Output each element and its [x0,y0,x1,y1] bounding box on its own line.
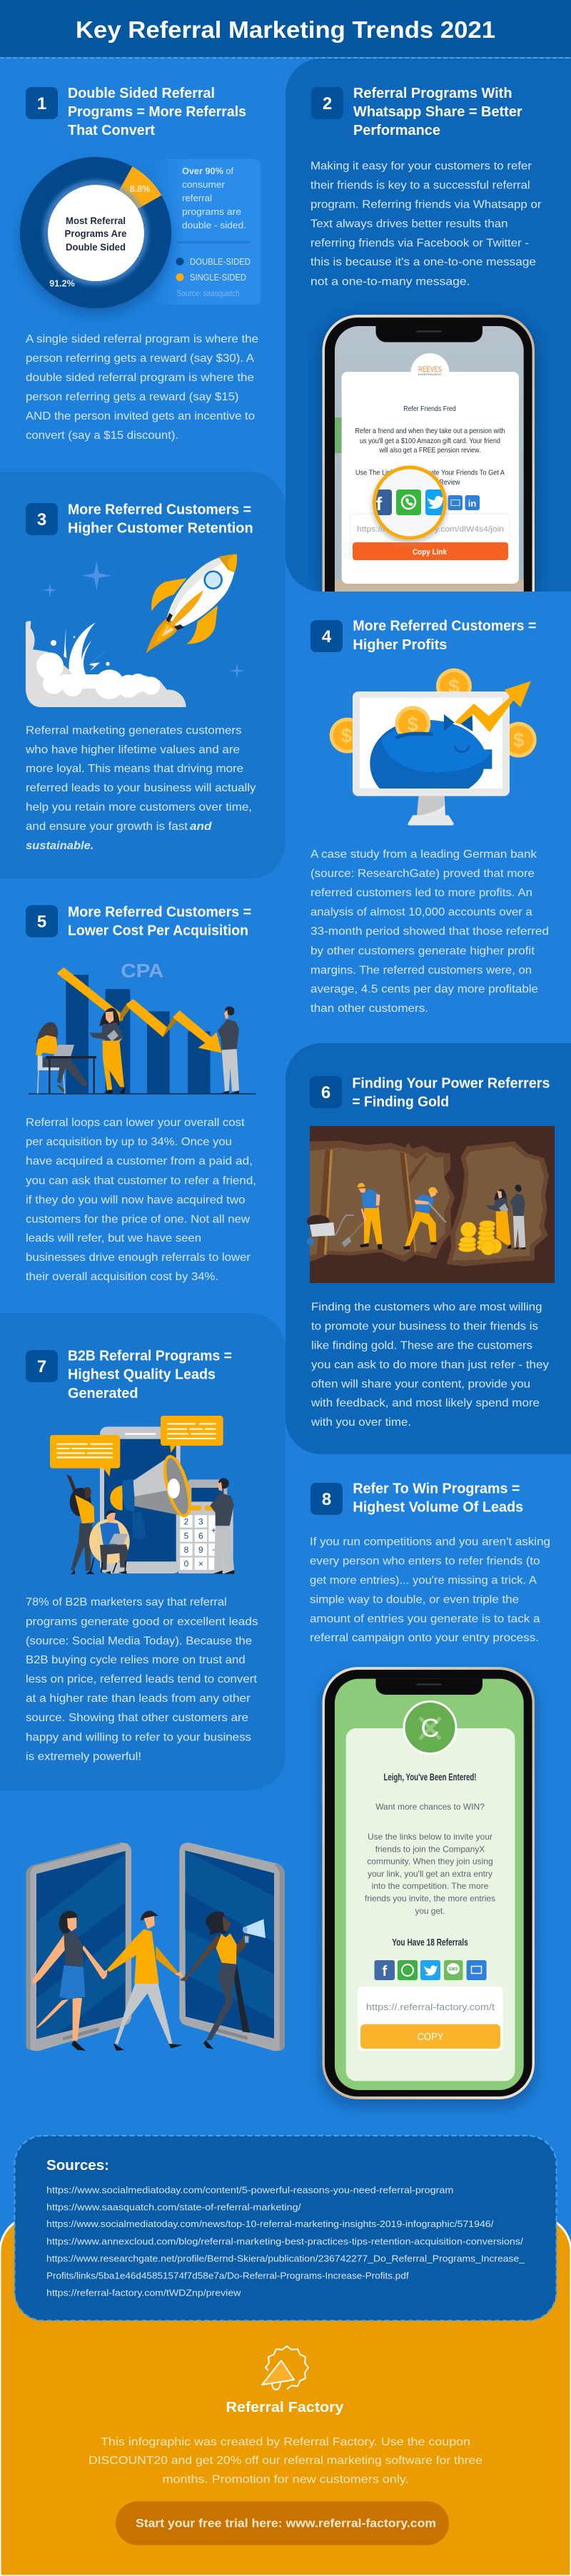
heading 3: Higher Customer Retention [68,521,253,537]
info box with legend: DOUBLE-SIDED [190,256,251,267]
heading 4: Higher Profits [353,637,447,653]
heading 3: More Referred Customers = [68,502,251,518]
body text 5: per acquisition by up to 34%. Once you [26,1136,232,1148]
speech bubble left [50,1435,120,1476]
man in yellow top [98,1911,183,2051]
phone screenshot: refer to win: community. When they join using [367,1857,493,1867]
calculator: 2 [184,1516,189,1526]
body text 1: double sided referral program is where the [26,372,254,384]
calculator: 9 [198,1545,203,1555]
body text 6: like finding gold. These are the customers [311,1340,532,1352]
panel background: section 3 [0,472,286,878]
phone screenshot: refer to win: COPY [417,2031,444,2043]
heading 1: Programs = More Referrals [68,104,246,120]
promotion text: months. Promotion for new customers only. [163,2473,408,2486]
info box with legend: referral [182,193,212,203]
heading 5: More Referred Customers = [68,905,251,921]
body text 3: help you retain more customers over time, [26,801,252,813]
body text 2: Making it easy for your customers to refer [310,160,532,173]
info box with legend: double - sided. [182,220,246,230]
body text 7: B2B buying cycle relies more on trust and [26,1654,246,1666]
body text 3: referred leads to your business will actually [26,782,256,794]
gold coins: $ [513,729,525,751]
heading 6: Finding Your Power Referrers [352,1076,550,1092]
body text 7: happy and willing to refer to your business [26,1731,251,1743]
body text 4: (source: ResearchGate) proved that more [310,868,535,880]
body text 7: (source: Social Media Today). Because the [26,1635,252,1647]
body text 2: their friends is key to a successful referral [310,180,530,191]
body text 4: average, 4.5 cents per day more profitable [310,983,538,995]
phone screenshot: referral widget: REEVES [418,365,442,374]
illustration: piggy bank on monitor [330,669,537,826]
heading 2 [353,86,522,138]
sources list [46,2185,525,2298]
body text 5 [26,1117,256,1283]
number badge 7 [26,1350,58,1382]
left tablet [26,1842,131,2051]
heading 6 [352,1076,550,1110]
donut chart: Double Sided [66,241,126,253]
share buttons: f [382,1964,387,1979]
footer band [0,2216,571,2576]
megaphone [110,1452,196,1541]
heading 1: Double Sided Referral [68,86,215,101]
body text 4: analysis of almost 10,000 accounts over a [310,906,532,918]
number badge 8: 8 [322,1490,331,1509]
heading 4: More Referred Customers = [353,619,536,634]
number badge 5 [26,905,58,938]
phone screenshot: refer to win: Leigh, You've Been Entered! [384,1771,477,1783]
section 3: customer retention [25,502,256,852]
gold coins [330,669,537,758]
heading 7: Generated [68,1386,138,1401]
illustration: piggy bank on monitor: $ [408,713,419,735]
body text 6: with you over time. [310,1416,411,1429]
body text 5: have acquired a customer from a paid ad, [26,1155,253,1167]
section 8: refer to win [310,1481,550,2108]
logo badge: C [421,1713,440,1743]
rocket [146,554,237,654]
donut chart: 91.2% [49,278,75,288]
body text 7: 78% of B2B marketers say that referral [26,1596,227,1608]
body text 6 [310,1302,549,1429]
sources list: Profits/links/5ba1e46d45851574f7d58e7a/Do-Referral-Programs-Increase-Profits.pdf [46,2270,409,2281]
section 2: whatsapp share [310,86,542,636]
body text 7: at a higher rate than leads from any other [26,1693,251,1705]
brand name: Referral Factory [226,2400,344,2415]
phone screenshot: referral widget: Free Pension Review [400,478,460,487]
info box with legend: Source: saasquatch [177,288,240,298]
phone screenshot: referral widget: Refer a friend and when they take out a pension with [355,427,505,435]
section 1: double sided programs [20,86,261,442]
donut chart: 8.8% [130,184,150,194]
heading 2: Performance [353,123,440,138]
illustration: mine with workers and gold [307,1126,555,1283]
icon: linkedin button [465,495,480,510]
info box with legend: Over 90% of [182,166,233,176]
section 4: higher profits [310,619,549,1015]
heading 2: Referral Programs With [353,86,512,101]
gold coins: $ [341,725,353,747]
calculator: 0 [184,1559,189,1569]
body text 2: this is because it's a one-to-one message [310,256,536,268]
worker with shovel [342,1183,383,1249]
phone screenshot: referral widget: Use The Link Below To Invite Your Friends To Get A [355,468,505,477]
phone screenshot: refer to win: you get. [415,1906,445,1916]
heading 7: B2B Referral Programs = [68,1349,232,1364]
body text 3: more loyal. This means that driving more [26,763,243,775]
phone screenshot: refer to win: friends you invite, the more entries [365,1894,495,1904]
body text 1: AND the person invited gets an incentive to [26,410,255,422]
phone screenshot: refer to win: into the competition. The more [372,1881,489,1891]
body text 1 [26,333,258,442]
body text 5: their overall acquisition cost by 34%. [26,1271,218,1283]
phone screenshot: refer to win: https://.referral-factory.com/t [366,2002,495,2012]
body text 2 [310,160,542,288]
illustration: rocket launch [26,554,244,707]
number badge 1: 1 [37,94,46,113]
man with hands on hips [210,1478,234,1574]
illustration: CPA falling chart: CPA [121,960,163,981]
icon: linkedin button: in [468,498,476,509]
donut chart: Programs Are [64,228,127,239]
number badge 8 [310,1483,343,1515]
body text 8: amount of entries you generate is to tack a [310,1613,540,1625]
icon: sparkle stars [43,561,244,678]
body text 6: often will share your content, provide you [311,1378,530,1390]
body text 2: program. Referring friends via Whatsapp or [310,198,542,211]
person seated at laptop [36,1022,96,1094]
person looking at chart [218,1006,239,1094]
call to action button [116,2501,449,2545]
heading 8: Highest Volume Of Leads [353,1499,523,1515]
speech bubble right [161,1416,223,1453]
growth arrow [455,681,531,732]
body text 3: who have higher lifetime values and are [25,744,240,756]
heading 2: Whatsapp Share = Better [353,104,522,120]
right tablet [179,1842,285,2051]
promotion text: DISCOUNT20 and get 20% off our referral marketing software for three [89,2455,482,2467]
panel background: section 2 [286,59,571,592]
info box with legend [151,159,261,305]
promotion text [89,2436,482,2486]
sources list: https://referral-factory.com/tWDZnp/preview [46,2287,241,2298]
number badge 3: 3 [37,510,46,529]
promotion text: This infographic was created by Referral Factory. Use the coupon [101,2436,470,2448]
body text 4: referred customers led to more profits. An [310,887,532,899]
phone screenshot: referral widget: https://referral-factory.com/dlW4s4/join [357,525,504,534]
phone screenshot: refer to win: Want more chances to WIN? [375,1802,485,1812]
body text 8: get more entries)... you're missing a trick. A [310,1574,537,1586]
heading 7: Highest Quality Leads [68,1367,216,1383]
number badge 4 [310,620,343,652]
number badge 7: 7 [37,1357,46,1376]
body text 2: not a one-to-many message. [310,275,470,288]
calculator: 5 [184,1531,189,1541]
calculator: 3 [198,1516,203,1526]
person seated in chair [89,1511,130,1574]
section 5: lower cost per acquisition [26,905,256,1283]
phone screenshot: referral widget: will also get a FREE pension review. [379,446,481,455]
sources heading: Sources: [46,2158,109,2174]
phone screenshot: refer to win: Use the links below to invite your [368,1832,492,1842]
heading 1 [68,86,246,138]
donut chart [20,157,171,315]
header band [0,0,571,58]
two people watching [486,1185,525,1249]
panel background: section 6 [286,1043,571,1454]
section 6: finding gold [307,1076,555,1429]
calculator: + [211,1525,216,1535]
number badge 4: 4 [322,627,332,646]
body text 8: If you run competitions and you aren't asking [310,1536,550,1548]
body text 3: sustainable. [26,840,94,852]
heading 5 [68,905,251,939]
heading 4 [353,619,536,653]
number badge 6 [310,1076,342,1108]
body text 7 [26,1596,258,1763]
body text 5: if they do you will now have acquired two [26,1194,246,1206]
heading 5: Lower Cost Per Acquisition [68,923,248,939]
heading 3 [68,502,253,537]
illustration: CPA falling chart [29,960,256,1095]
gold coins: $ [448,676,460,698]
number badge 5: 5 [37,912,46,932]
heading 8: Refer To Win Programs = [353,1481,520,1496]
body text 8: simple way to double, or even triple the [310,1593,519,1606]
body text 8: every person who enters to refer friends (to [310,1556,540,1567]
body text 4: margins. The referred customers were, on [310,964,532,976]
icon: mail button [448,495,463,510]
body text 8: referral campaign onto your entry process. [310,1632,539,1644]
phone screenshot: referral widget: INDEPENDENT [418,372,443,376]
wheelbarrow [307,1215,354,1245]
donut chart: Most Referral [66,215,126,226]
body text 1: person referring gets a reward (say $30). A [26,353,254,365]
sources list: https://www.saasquatch.com/state-of-referral-marketing/ [46,2201,301,2212]
phone screenshot: refer to win: your link, you'll get an extra entry [368,1869,492,1879]
sources list: https://www.researchgate.net/profile/Bernd-Skiera/publication/236742277_Do_Referral_Programs_Increase_ [46,2253,525,2264]
number badge 3 [26,503,58,535]
body text 3: Referral marketing generates customers [26,724,241,736]
body text 4: A case study from a leading German bank [310,848,537,861]
body text 5: Referral loops can lower your overall cost [26,1117,245,1129]
launch cloud [26,621,186,707]
number badge 6: 6 [321,1083,330,1102]
body text 6: you can ask to do more than just refer - they [311,1359,549,1371]
magnified share buttons lens [370,465,450,545]
icon: referral factory logo [262,2346,308,2390]
body text 3 [25,724,256,852]
body text 1: person referring gets a reward (say $15) [26,391,238,403]
body text 5: businesses drive enough referrals to lower [26,1252,251,1264]
share buttons [374,1960,487,1980]
body text 6: Finding the customers who are most willing [311,1302,542,1313]
logo badge [404,1701,456,1754]
phone screenshot: referral widget [319,315,537,636]
panel background: section 7 [0,1313,286,1790]
share buttons: SMS [448,1968,458,1972]
body text 5: leads will refer, but we have seen [26,1232,201,1244]
phone screenshot: refer to win: You Have 18 Referrals [392,1937,468,1948]
body text 2: Text always drives better results than [310,218,508,230]
footer content [89,2346,482,2545]
body text 4: by other customers generate higher profit [310,945,535,957]
body text 7: source. Showing that other customers are [26,1712,248,1724]
body text 1: A single sided referral program is where the [26,333,258,345]
body text 4: than other customers. [310,1003,428,1015]
woman pointing [66,1474,95,1574]
heading 8 [353,1481,523,1515]
body text 5: you can ask that customer to refer a friend, [26,1175,256,1187]
calculator [178,1479,233,1573]
body text 5: customers for the price of one. Not all new [26,1213,250,1225]
phone screenshot: referral widget: Refer Friends Fred [403,405,456,413]
body text 4 [310,848,549,1015]
heading 7 [68,1349,232,1401]
illustration: people walking between phones [26,1842,285,2051]
phone screenshot: referral widget: Copy Link [413,548,448,557]
sources list: https://www.socialmediatoday.com/content/5-powerful-reasons-you-need-referral-program [46,2185,453,2195]
info box with legend: programs are [182,206,241,217]
panel: sources [14,2136,557,2321]
person with clipboard [89,1008,126,1094]
calculator: 8 [184,1545,189,1555]
info box with legend: SINGLE-SIDED [190,272,246,283]
body text 7: is extremely powerful! [26,1750,141,1763]
number badge 2 [311,87,343,119]
worker with jackhammer [403,1187,446,1249]
section 7: B2B leads [26,1349,258,1763]
illustration: megaphone on phone [50,1416,234,1574]
calculator: − [212,1545,217,1555]
phone screenshot: referral widget: us you'll get a $100 Amazon gift card. Your friend [360,437,500,445]
call to action button: Start your free trial here: www.referral-factory.com [136,2516,436,2530]
phone screenshot: refer to win: friends to join the CompanyX [375,1844,485,1854]
body text 8 [310,1536,550,1644]
heading 6: = Finding Gold [352,1095,449,1110]
body text 6: with feedback, and most likely spend more [310,1397,540,1409]
heading 1: That Convert [68,123,155,138]
woman in blue skirt [32,1911,107,2051]
body text 1: convert (say a $15 discount). [26,430,178,442]
body text 7: programs generate good or excellent leads [26,1616,258,1628]
body text 2: referring friends via Facebook or Twitter - [310,237,529,250]
body text 7: less on price, referred leads tend to convert [26,1673,258,1685]
body text 3: and ensure your growth is fast [26,821,188,833]
title: Key Referral Marketing Trends 2021 [76,16,495,43]
calculator: 6 [198,1531,203,1541]
body text 4: 33-month period showed that those referred [310,926,549,938]
number badge 2: 2 [323,94,332,113]
body text 3: and [190,821,213,833]
number badge 1 [26,87,58,119]
phone screenshot: refer to win [319,1667,537,2108]
info box with legend: consumer [182,179,226,190]
calculator: × [198,1559,203,1569]
body text 6: to promote your business to their friends is [311,1320,538,1333]
woman with megaphone [180,1912,266,2049]
magnified share buttons lens: f [376,493,383,514]
sources list: https://www.annexcloud.com/blog/referral-marketing-best-practices-tips-retention-acquisition-conversions/ [46,2236,523,2246]
sources list: https://www.socialmediatoday.com/news/top-10-referral-marketing-insights-2019-infographic/571946/ [46,2218,494,2229]
gold coin stacks [459,1221,502,1255]
